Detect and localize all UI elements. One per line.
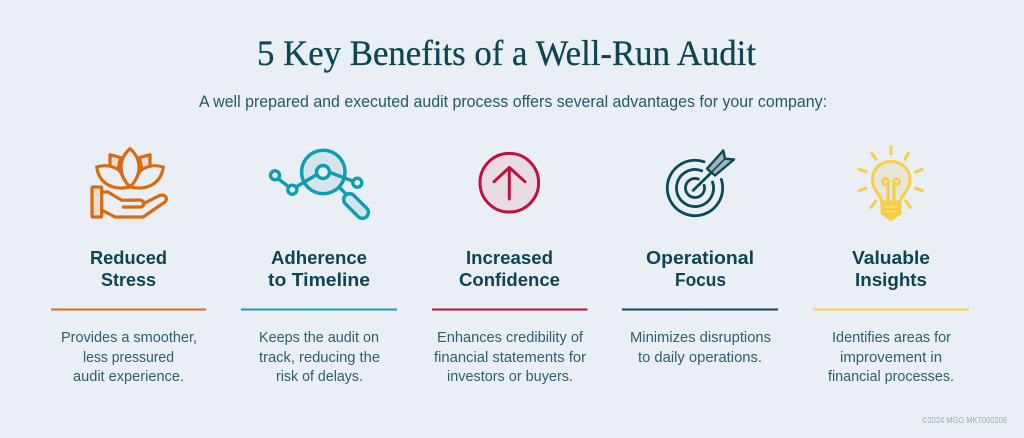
heading <box>90 247 167 290</box>
heading: Reduced <box>90 247 167 268</box>
copyright note: ©2024 MGO MKT000206 <box>922 415 1007 425</box>
panel: adherence to timeline <box>241 150 397 385</box>
heading: to Timeline <box>268 269 370 290</box>
panel: reduced stress <box>51 149 206 385</box>
description <box>61 330 197 385</box>
description: audit experience. <box>73 369 184 385</box>
description: Provides a smoother, <box>61 330 197 346</box>
heading: Stress <box>101 269 156 290</box>
subtitle: A well prepared and executed audit process offers several advantages for your company: <box>199 93 827 111</box>
heading: Focus <box>675 269 726 290</box>
description: Identifies areas for <box>832 330 951 346</box>
description: Minimizes disruptions <box>630 330 771 346</box>
description: track, reducing the <box>259 350 380 366</box>
description <box>434 330 586 385</box>
description: less pressured <box>83 350 174 366</box>
panel: increased confidence <box>432 153 588 385</box>
heading: Operational <box>646 247 754 268</box>
description <box>828 330 954 385</box>
icon: light bulb <box>859 147 922 220</box>
heading: Insights <box>855 269 927 290</box>
heading: Valuable <box>852 247 930 268</box>
heading: Confidence <box>459 269 560 290</box>
icon: magnifier over line chart <box>270 150 371 221</box>
panel: operational focus <box>622 150 778 366</box>
heading <box>852 247 930 290</box>
heading: Increased <box>466 247 553 268</box>
icon: lotus in open hand <box>92 149 166 217</box>
heading <box>459 247 560 290</box>
description: financial processes. <box>828 369 954 385</box>
description <box>630 330 771 366</box>
description: investors or buyers. <box>447 369 573 385</box>
description: to daily operations. <box>638 350 762 366</box>
description: Keeps the audit on <box>259 330 379 346</box>
heading: Adherence <box>271 247 367 268</box>
description: financial statements for <box>434 350 586 366</box>
heading <box>268 247 370 290</box>
icon: up arrow in circle <box>480 153 539 212</box>
description <box>259 330 380 385</box>
description: risk of delays. <box>276 369 363 385</box>
panel: valuable insights <box>813 147 969 385</box>
heading <box>646 247 754 290</box>
description: Enhances credibility of <box>437 330 584 346</box>
icon: target with arrow <box>667 150 734 216</box>
description: improvement in <box>840 350 942 366</box>
title: 5 Key Benefits of a Well-Run Audit <box>257 33 756 73</box>
